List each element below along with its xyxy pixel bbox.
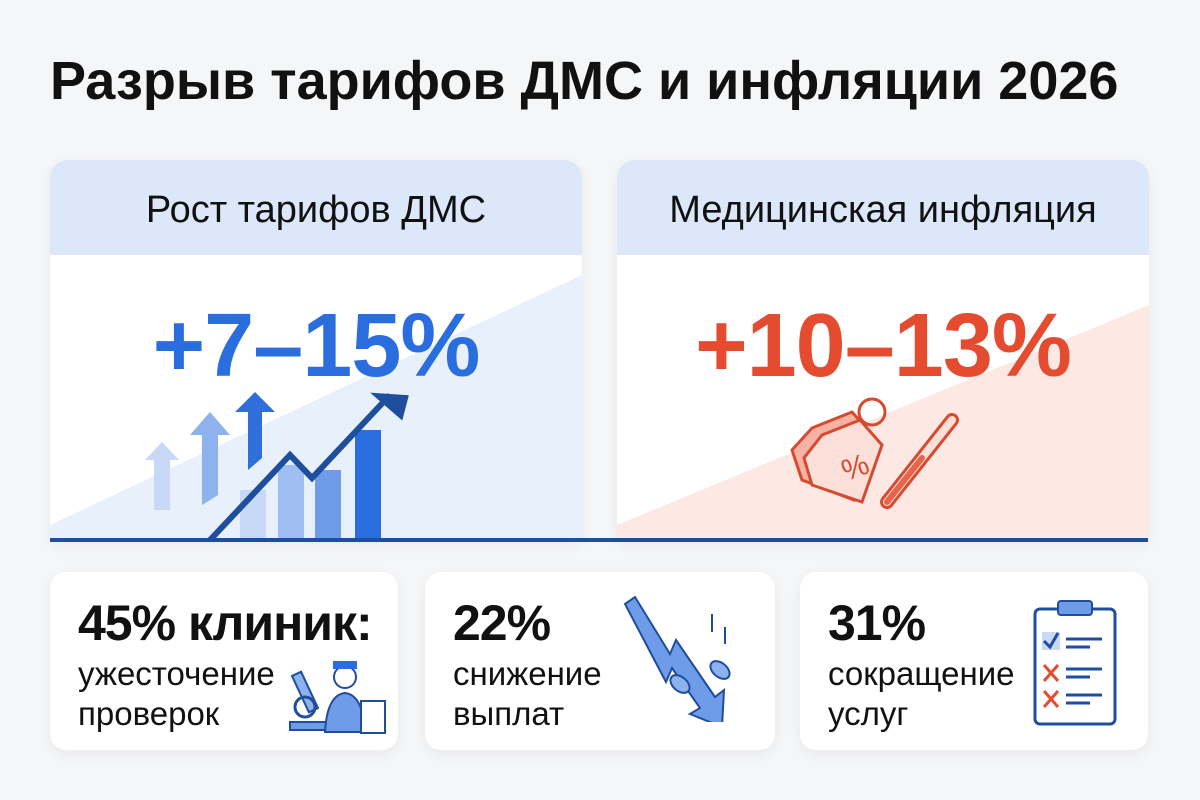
card: 22% payouts: выплат xyxy=(453,695,564,732)
card: 45% clinics xyxy=(50,572,398,750)
card: 31% services: 31% xyxy=(828,595,925,651)
icon: price tag and thermometer xyxy=(790,398,959,509)
card: 31% services: сокращение xyxy=(828,655,1015,692)
heading: tariff growth: Рост тарифов ДМС xyxy=(146,189,486,231)
card: 22% payouts: снижение xyxy=(453,655,602,692)
heading: medical inflation: Медицинская инфляция xyxy=(669,189,1097,231)
card: 45% clinics: ужесточение xyxy=(78,655,275,692)
icon: growth chart with arrows xyxy=(145,392,409,538)
card: 22% payouts xyxy=(425,572,775,750)
icon: clipboard checklist xyxy=(1034,600,1116,726)
heading: medical inflation xyxy=(617,160,1149,255)
icon: microscope and inspector xyxy=(289,661,386,734)
big number: +10–13%: +10–13% xyxy=(695,296,1071,396)
icon: falling arrow with coins xyxy=(624,596,731,722)
card: 22% payouts: 22% xyxy=(453,595,550,651)
panel: medical inflation xyxy=(617,160,1149,540)
card: 31% services: услуг xyxy=(828,695,908,732)
big number: +7–15%: +7–15% xyxy=(153,296,479,396)
card: 45% clinics: проверок xyxy=(78,695,219,732)
heading: tariff growth xyxy=(50,160,582,255)
card: 31% services xyxy=(800,572,1148,750)
panel: tariff growth xyxy=(50,160,582,540)
card: 45% clinics: 45% клиник: xyxy=(78,595,372,651)
icon: price tag and thermometer: % xyxy=(837,448,874,488)
title: Разрыв тарифов ДМС и инфляции 2026 xyxy=(50,51,1118,111)
